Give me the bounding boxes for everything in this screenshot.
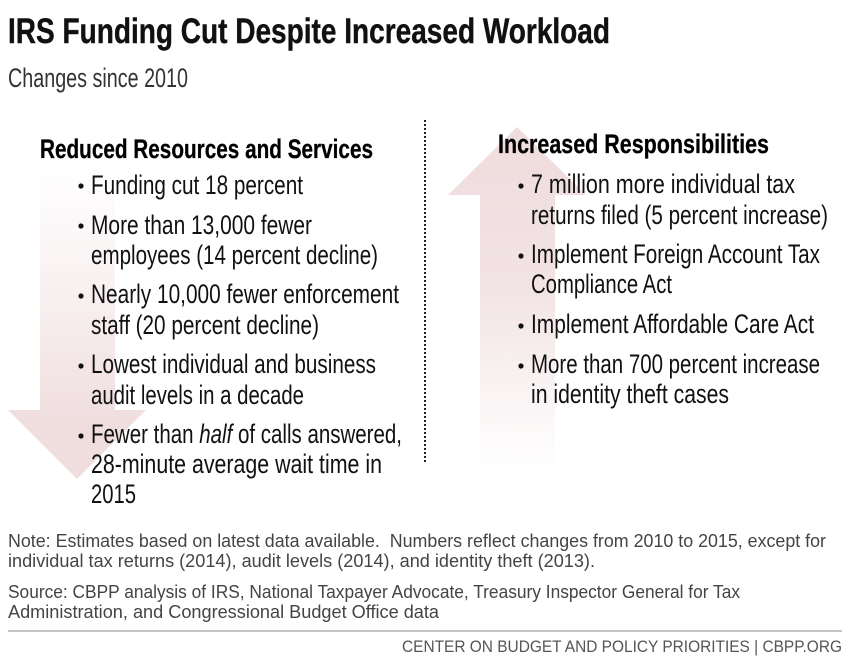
source: [8, 582, 740, 622]
source: Source: CBPP analysis of IRS, National Taxpayer Advocate, Treasury Inspector General for Tax: [8, 582, 740, 602]
bullet: fewer employees: employees (14 percent decline): [91, 240, 378, 270]
bullet: fewer enforcement staff: staff (20 percent decline): [91, 310, 319, 340]
bullet: audit levels: [78, 349, 376, 410]
bullet: calls answered: 28-minute average wait time in: [91, 449, 382, 479]
bullet: fewer employees: More than 13,000 fewer: [91, 210, 312, 240]
bullet: FATCA: [518, 239, 820, 299]
bullet: more returns: [518, 169, 828, 230]
arrow: down: [8, 165, 146, 479]
bullet: calls answered: 2015: [91, 479, 136, 509]
bullet: fewer employees: [78, 210, 378, 270]
title: IRS Funding Cut Despite Increased Workload: [8, 12, 610, 51]
bullet: audit levels: Lowest individual and business: [91, 349, 376, 379]
panel: reduced resources and services: [40, 134, 402, 509]
note: Note: Estimates based on latest data available. Numbers reflect changes from 2010 to 2015, except for: [8, 531, 826, 551]
subtitle: Changes since 2010: [8, 63, 188, 93]
bullet: identity theft: [518, 349, 820, 409]
dotted divider: [424, 120, 426, 462]
note: [8, 531, 826, 571]
bullet: calls answered: Fewer than half of calls answered,: [91, 419, 402, 449]
source: Administration, and Congressional Budget Office data: [8, 602, 440, 622]
heading: reduced resources: Reduced Resources and Services: [40, 134, 373, 164]
bullet: identity theft: in identity theft cases: [531, 379, 729, 409]
heading: increased responsibilities: Increased Responsibilities: [498, 129, 769, 159]
note: individual tax returns (2014), audit levels (2014), and identity theft (2013).: [8, 551, 595, 571]
bullet: FATCA: Compliance Act: [531, 269, 672, 299]
bullet: calls answered: [78, 419, 402, 509]
bullet: fewer enforcement staff: Nearly 10,000 fewer enforcement: [91, 279, 399, 309]
bullet: fewer enforcement staff: [78, 279, 399, 340]
bullet: funding cut: Funding cut 18 percent: [91, 170, 303, 200]
bullet: audit levels: audit levels in a decade: [91, 380, 304, 410]
panel: increased responsibilities: [498, 129, 828, 409]
arrow: up: [448, 127, 586, 472]
